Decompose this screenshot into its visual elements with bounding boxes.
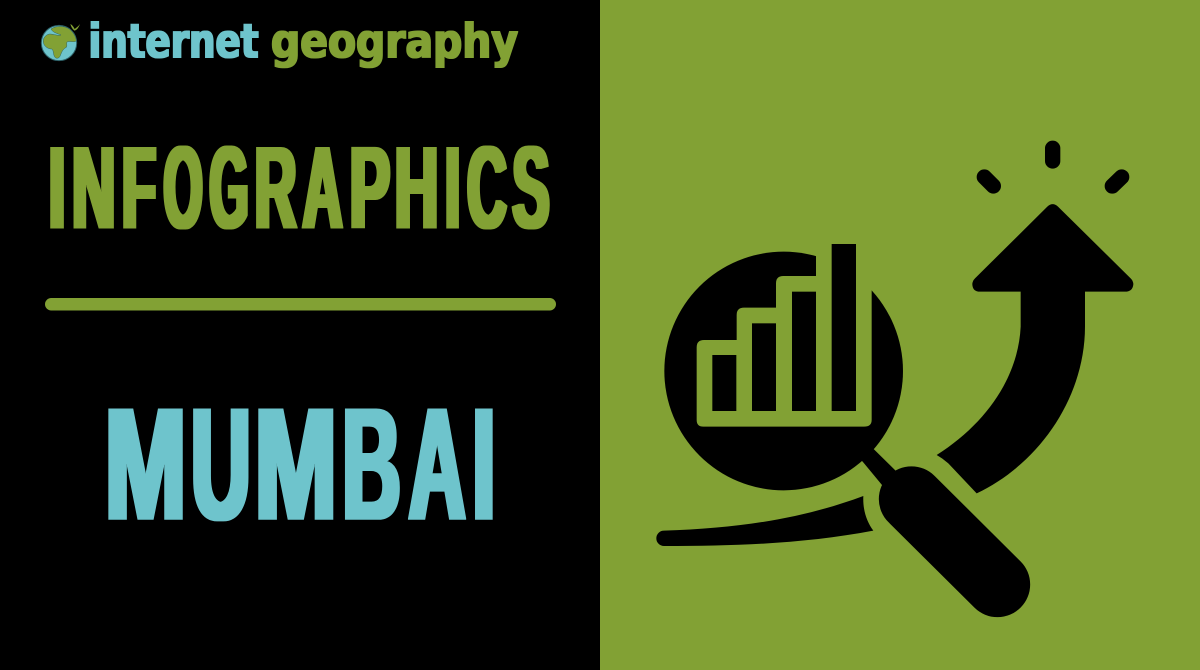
heading: INFOGRAPHICS: H — [395, 122, 438, 253]
logo word: internet: internet — [88, 14, 258, 70]
icon: sparks above arrow — [984, 148, 1122, 186]
text: S — [512, 122, 549, 253]
heading: INFOGRAPHICS: P — [350, 122, 390, 253]
heading: MUMBAI: B — [343, 374, 400, 553]
heading: INFOGRAPHICS: F — [122, 122, 156, 253]
heading: MUMBAI: A — [409, 374, 465, 553]
heading: INFOGRAPHICS: G — [210, 122, 248, 253]
heading: INFOGRAPHICS: I — [445, 122, 460, 253]
magnifier handle — [911, 499, 997, 584]
trend line tail — [656, 496, 873, 546]
icon: globe with leaves — [41, 24, 80, 61]
heading: INFOGRAPHICS: O — [164, 122, 202, 253]
heading: INFOGRAPHICS: R — [255, 122, 296, 253]
icon: rising arrow — [937, 204, 1133, 493]
logo: internet geography — [41, 14, 518, 70]
heading: INFOGRAPHICS: N — [72, 122, 115, 253]
bar chart — [712, 244, 856, 411]
heading: MUMBAI: I — [473, 374, 495, 553]
heading: INFOGRAPHICS: I — [49, 122, 65, 253]
icon: magnifying glass, bar chart and rising arrow — [656, 148, 1133, 584]
divider bar — [45, 298, 556, 310]
heading: MUMBAI: M — [255, 374, 337, 553]
heading: INFOGRAPHICS: A — [303, 122, 342, 253]
panel: right green background — [600, 0, 1200, 670]
icon: magnifier lens — [664, 252, 903, 490]
heading: MUMBAI: M — [105, 374, 186, 553]
heading: INFOGRAPHICS: C — [467, 122, 506, 253]
panel: left black background — [0, 0, 600, 670]
logo word: geography: geography — [271, 14, 518, 70]
magnifier neck — [857, 443, 898, 487]
heading: MUMBAI: U — [191, 374, 250, 553]
chart frame cut-out — [697, 240, 872, 427]
